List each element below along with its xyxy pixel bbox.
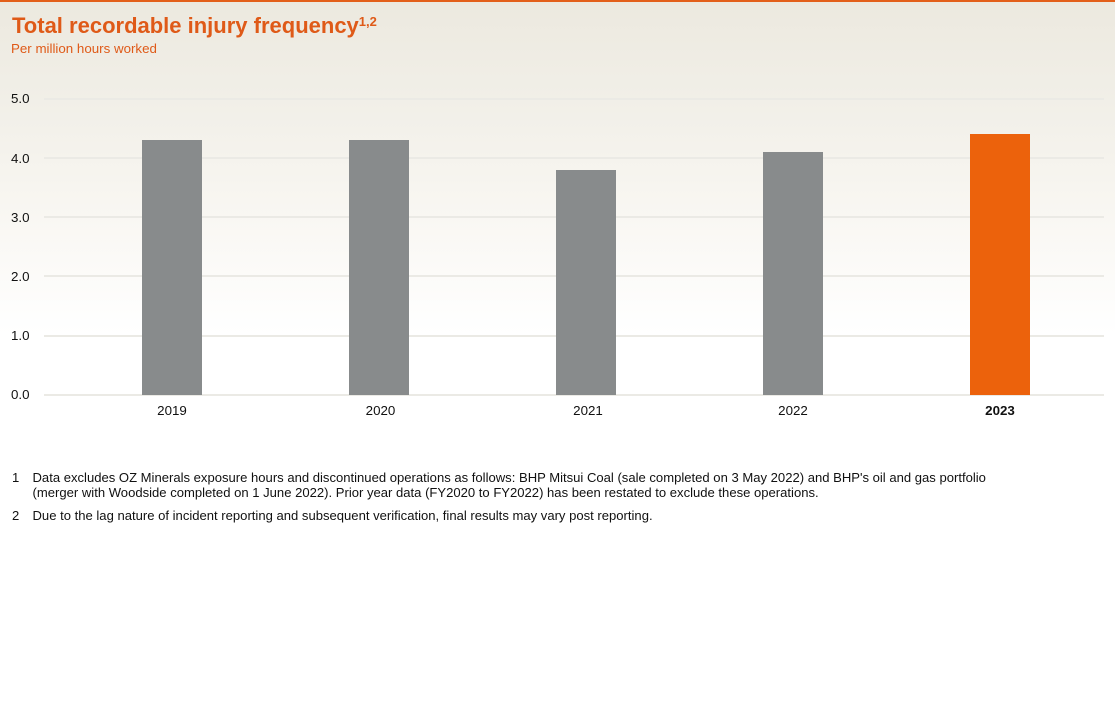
bar 2020: 4.3 bbox=[349, 140, 409, 395]
bar 2019: 4.3 bbox=[142, 140, 202, 395]
x-axis label 2022: 2022 bbox=[778, 402, 808, 418]
bar chart bbox=[11, 91, 1104, 418]
background gradient bbox=[0, 0, 1115, 335]
y-axis label 3.0: 3.0 bbox=[11, 210, 30, 225]
y-axis label 2.0: 2.0 bbox=[11, 269, 30, 284]
title: Total recordable injury frequency1,2 bbox=[12, 13, 377, 38]
footnote 1 bbox=[12, 470, 986, 500]
y-axis label 4.0: 4.0 bbox=[11, 151, 30, 166]
subtitle: Per million hours worked bbox=[11, 41, 157, 56]
top accent rule bbox=[0, 0, 1115, 2]
footnote 1: 1 bbox=[12, 470, 19, 485]
y-axis label 1.0: 1.0 bbox=[11, 328, 30, 343]
x-axis label 2019: 2019 bbox=[157, 402, 187, 418]
x-axis label 2023: 2023 bbox=[985, 402, 1015, 418]
footnote 1: (merger with Woodside completed on 1 June 2022). Prior year data (FY2020 to FY2022) has been restated to exclude these operations. bbox=[32, 485, 819, 500]
footnote 2: Due to the lag nature of incident reporting and subsequent verification, final results may vary post reporting. bbox=[32, 508, 653, 523]
footnote 1: Data excludes OZ Minerals exposure hours and discontinued operations as follows: BHP Mitsui Coal (sale completed on 3 May 2022) and BHP's oil and gas portfolio bbox=[32, 470, 986, 485]
bar 2023: 4.4 bbox=[970, 134, 1030, 395]
bar 2022: 4.1 bbox=[763, 152, 823, 395]
footnote 2: 2 bbox=[12, 508, 19, 523]
y-axis label 5.0: 5.0 bbox=[11, 91, 30, 106]
x-axis label 2021: 2021 bbox=[573, 402, 603, 418]
y-axis label 0.0: 0.0 bbox=[11, 387, 30, 402]
bar 2021: 3.8 bbox=[556, 170, 616, 395]
x-axis label 2020: 2020 bbox=[366, 402, 395, 418]
